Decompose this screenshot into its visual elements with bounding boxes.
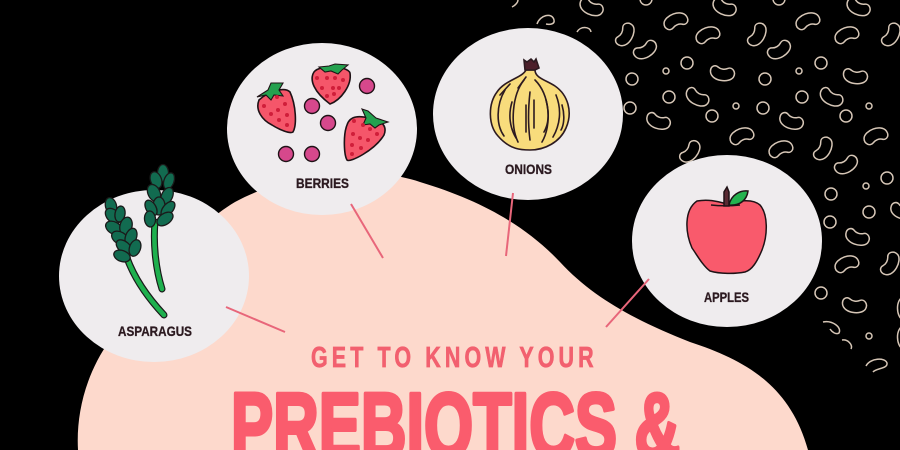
panel: asparagus xyxy=(59,164,249,362)
bean pattern: decorative microbes xyxy=(512,0,900,372)
label: apples: APPLES xyxy=(704,289,749,305)
icon: apple xyxy=(687,187,766,273)
label: berries: BERRIES xyxy=(296,175,349,191)
connector: asparagus xyxy=(226,307,285,332)
pink blob background xyxy=(78,173,808,450)
connector: apples xyxy=(606,279,649,327)
connector: onions xyxy=(506,193,513,256)
label: onions: ONIONS xyxy=(505,161,552,177)
panel: berries xyxy=(227,43,417,215)
connector: berries xyxy=(351,204,383,258)
icon: onion xyxy=(490,59,569,150)
panel: apples xyxy=(632,155,822,327)
icon: berries xyxy=(257,64,388,162)
subtitle: GET TO KNOW YOUR xyxy=(311,342,598,374)
label: asparagus: ASPARAGUS xyxy=(118,323,192,339)
panel: onions xyxy=(433,28,623,200)
icon: asparagus xyxy=(102,164,178,315)
